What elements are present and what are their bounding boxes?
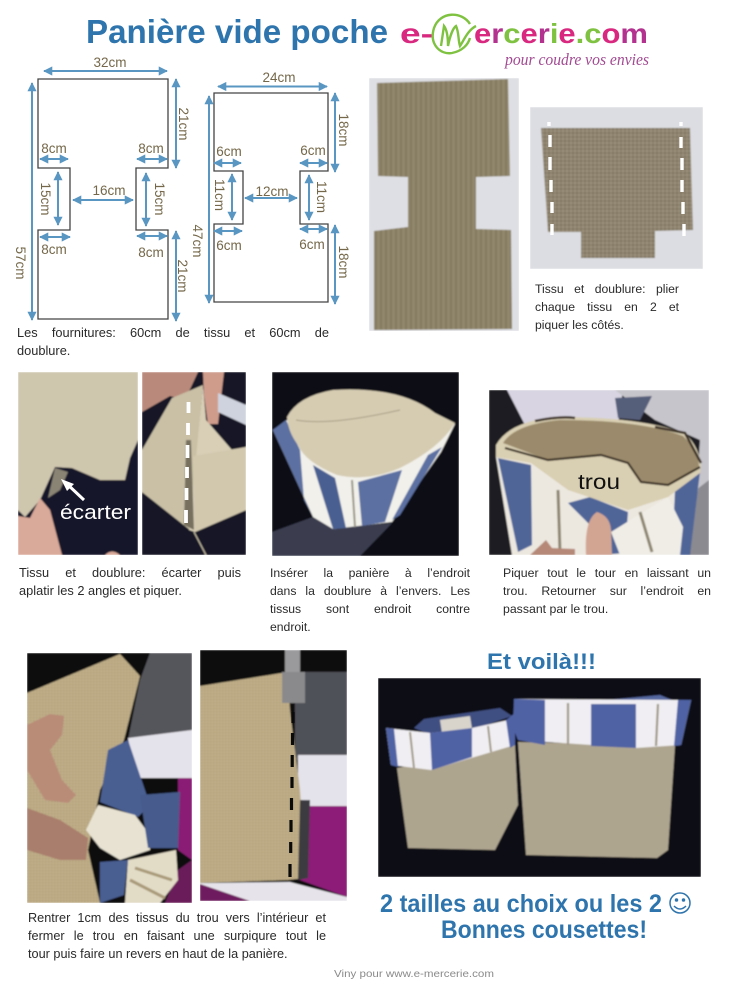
pattern diagram: large size: 8cm xyxy=(138,245,164,260)
text: close the hole: tour puis faire un revers en haut de la panière. xyxy=(28,947,288,961)
text: supplies: Les fournitures: 60cm de tissu et 60cm de xyxy=(17,325,329,340)
logo: e-mercerie.com: e- xyxy=(400,18,433,49)
pattern diagram: large size: 57cm xyxy=(13,246,28,280)
closing line: bonnes cousettes: Bonnes cousettes! xyxy=(441,916,647,944)
footer credit: Viny pour www.e-mercerie.com xyxy=(334,968,494,980)
icon: green m swirl xyxy=(433,15,476,53)
pattern diagram: large size: 21cm xyxy=(175,259,190,293)
text: fold and stitch sides xyxy=(535,282,679,332)
text: flatten corners: aplatir les 2 angles et piquer. xyxy=(19,583,182,598)
title: Panière vide poche xyxy=(86,13,388,50)
icon: smiley xyxy=(670,893,690,913)
photo: cut fabric flat xyxy=(369,78,519,331)
photo: stitched bag with hole, label trou: trou xyxy=(578,471,620,494)
pattern diagram: small size: 12cm xyxy=(255,184,289,199)
text: close the hole: fermer le trou en faisant une surpiqure tout le xyxy=(28,929,326,943)
pattern diagram: small size: 6cm xyxy=(216,238,242,253)
photo: folded fabric with white stitch line xyxy=(530,107,703,269)
text: stitch around xyxy=(503,566,711,616)
photo: closing the hole xyxy=(27,653,192,903)
photo: spreading the corner, with label ecarter: écarter xyxy=(60,502,131,524)
pattern diagram: small size: 6cm xyxy=(299,237,325,252)
closing line: 2 sizes: 2 tailles au choix ou les 2 xyxy=(380,890,662,918)
pattern diagram: large size: 8cm xyxy=(138,141,164,156)
tagline: pour coudre vos envies xyxy=(504,50,649,69)
logo: e-mercerie.com: ercerie.com xyxy=(474,18,648,49)
text: insert bag xyxy=(270,566,470,634)
text: insert bag: tissus sont endroit contre xyxy=(270,602,470,616)
logo: e-mercerie.com xyxy=(400,15,649,69)
pattern diagram: large size: 21cm xyxy=(176,107,191,141)
photo: two finished bags xyxy=(378,678,701,877)
text: stitch around: passant par le trou. xyxy=(503,602,608,616)
pattern diagram: small size: 18cm xyxy=(336,113,351,147)
heading: et voila: Et voilà!!! xyxy=(487,649,596,674)
pattern diagram: small size: 24cm xyxy=(262,70,296,85)
text: fold and stitch sides: chaque tissu en 2 et xyxy=(535,300,679,314)
text: close the hole: Rentrer 1cm des tissus du trou vers l’intérieur et xyxy=(28,911,326,925)
pattern diagram: small size: 11cm xyxy=(314,181,329,213)
text: insert bag: Insérer la panière à l’endroit xyxy=(270,566,470,580)
photo: spreading the corner, with label ecarter xyxy=(18,372,138,555)
text: close the hole xyxy=(28,911,326,961)
text: insert bag: endroit. xyxy=(270,620,311,634)
pattern diagram: large size: 8cm xyxy=(41,242,67,257)
text: insert bag: dans la doublure à l’envers. Les xyxy=(270,584,470,598)
left bag xyxy=(386,708,518,850)
text: supplies xyxy=(17,325,329,358)
pattern diagram: large size xyxy=(13,55,191,321)
photo: topstitching, black stitch line xyxy=(200,650,347,901)
text: fold and stitch sides: Tissu et doublure: plier xyxy=(535,282,679,296)
pattern diagram: large size: 16cm xyxy=(92,183,126,198)
pattern diagram: small size: 18cm xyxy=(336,245,351,279)
pattern diagram: large size: 15cm xyxy=(38,182,53,216)
text: stitch around: trou. Retourner sur l’endroit en xyxy=(503,584,711,598)
pattern diagram: large size: 15cm xyxy=(152,182,167,216)
text: stitch around: Piquer tout le tour en laissant un xyxy=(503,566,711,580)
photo: corner flattened with white stitch line xyxy=(142,372,246,555)
text: fold and stitch sides: piquer les côtés. xyxy=(535,318,624,332)
pattern diagram: small size: 6cm xyxy=(216,144,242,159)
photo: inserting bag into lining xyxy=(272,372,459,556)
pattern diagram: small size: 11cm xyxy=(212,179,227,211)
text: supplies: doublure. xyxy=(17,343,70,358)
pattern diagram: small size: 47cm xyxy=(190,224,205,258)
text: flatten corners: Tissu et doublure: écarter puis xyxy=(19,565,241,580)
pattern diagram: small size: 6cm xyxy=(300,143,326,158)
pattern diagram: large size: 8cm xyxy=(41,141,67,156)
pattern diagram: small size xyxy=(190,70,351,304)
text: flatten corners xyxy=(19,565,241,598)
right bag xyxy=(513,695,691,858)
photo: stitched bag with hole, label trou xyxy=(489,390,709,555)
pattern diagram: large size: 32cm xyxy=(93,55,127,70)
